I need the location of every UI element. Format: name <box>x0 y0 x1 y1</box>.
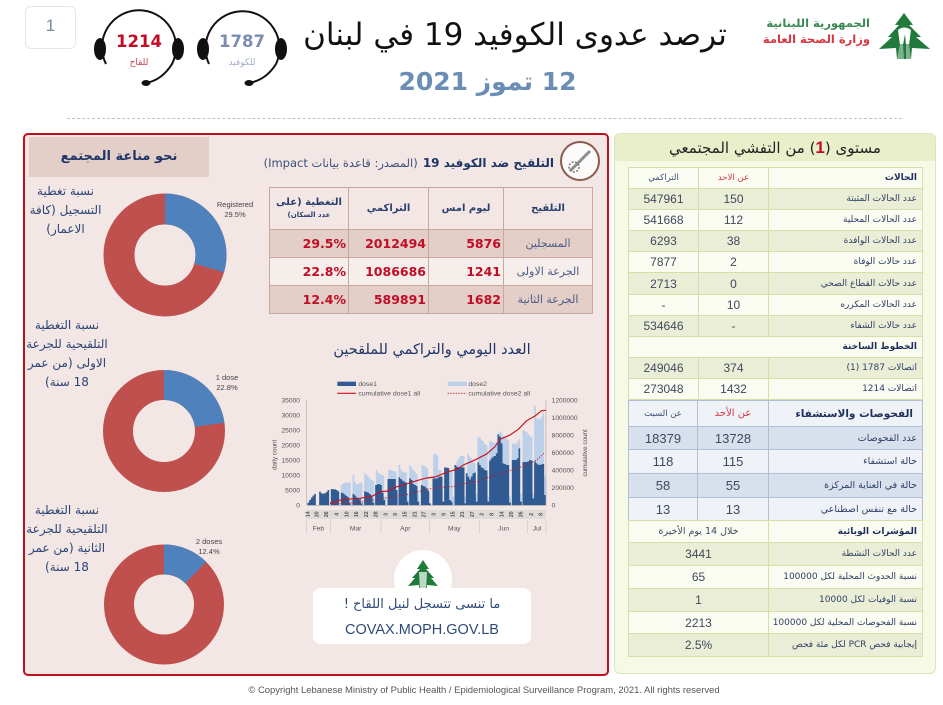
table: cases and hotlines: 541668 <box>643 213 684 227</box>
bar and line chart: daily and cumulative vaccinations: dose2 <box>468 381 487 388</box>
heading: towards community immunity: نحو مناعة المجتمع <box>61 149 177 164</box>
table: cases and hotlines: 6293 <box>650 234 677 248</box>
bar and line chart: daily and cumulative vaccinations: 5000 <box>285 488 300 495</box>
table: epidemiological indicators: المؤشرات الوبائية <box>838 526 917 536</box>
vaccination table <box>269 187 593 314</box>
bar and line chart: daily and cumulative vaccinations: 27 <box>470 511 476 517</box>
bar and line chart: daily and cumulative vaccinations: 35000 <box>281 398 300 405</box>
panel: community transmission level <box>614 133 936 674</box>
bar and line chart: daily and cumulative vaccinations: 30000 <box>281 413 300 420</box>
vaccination table: 2012494 <box>365 236 426 251</box>
bar and line chart: daily and cumulative vaccinations: dose1 <box>358 381 377 388</box>
hotline headset: covid 1787: 1787 <box>219 32 265 51</box>
table: epidemiological indicators: 2.5% <box>685 638 712 652</box>
vaccination table: عدد السكان) <box>288 210 330 218</box>
vaccination table: 589891 <box>374 292 426 307</box>
call to action: register for the vaccine <box>313 550 531 644</box>
table: cases and hotlines: 10 <box>727 298 740 312</box>
table: tests and hospitalisation: 118 <box>653 454 673 469</box>
table: tests and hospitalisation: 13 <box>726 502 740 516</box>
ministry name <box>763 16 870 46</box>
donut value label: 1 dose: 22.8% <box>216 383 238 392</box>
table: cases and hotlines: 0 <box>730 276 737 290</box>
vaccination table: 1241 <box>466 264 501 279</box>
vaccination table: التغطية (على <box>276 196 342 208</box>
table: epidemiological indicators: إيجابية فحص PCR لكل مئة فحص <box>792 640 917 650</box>
donut value label: registered <box>217 200 253 219</box>
table: tests and hospitalisation: 55 <box>726 478 740 493</box>
bar and line chart: daily and cumulative vaccinations: 4 <box>335 513 341 516</box>
bar and line chart: daily and cumulative vaccinations: 26 <box>519 511 525 517</box>
donut label: first dose: نسبة التغطية التلقيحية للجرعة الاولى (من عمر 18 سنة) <box>26 318 108 389</box>
bar and line chart: daily and cumulative vaccinations: cumulative dose1 all <box>358 391 421 398</box>
vaccination table: 1682 <box>466 292 501 307</box>
bar and line chart: daily and cumulative vaccinations: 21 <box>460 511 466 517</box>
table: cases and hotlines: 2713 <box>650 276 677 290</box>
table: tests and hospitalisation: حالة في العناية المركزة <box>824 480 917 491</box>
bar and line chart: daily and cumulative vaccinations: 16 <box>354 511 360 517</box>
vaccination table: الجرعة الثانية <box>518 293 578 306</box>
donut label: second dose: نسبة التغطية التلقيحية للجرعة الثانية (من عمر 18 سنة) <box>26 503 108 574</box>
vaccination table: 1086686 <box>365 264 426 279</box>
bar and line chart: daily and cumulative vaccinations: 26 <box>324 511 330 517</box>
vaccination table: 12.4% <box>303 292 346 307</box>
bar and line chart: daily and cumulative vaccinations: 22 <box>364 511 370 517</box>
bar and line chart: daily and cumulative vaccinations: Mar <box>350 525 362 532</box>
bar and line chart: daily and cumulative vaccinations: 20 <box>509 511 515 517</box>
bar and line chart: daily and cumulative vaccinations: 15 <box>403 511 409 517</box>
donut value label: 2 doses: 12.4% <box>198 547 220 556</box>
bar and line chart: daily and cumulative vaccinations: 10 <box>345 511 351 517</box>
table: cases and hotlines: 249046 <box>643 361 684 375</box>
table: cases and hotlines: 1432 <box>720 382 747 396</box>
table: tests and hospitalisation: 18379 <box>645 430 681 446</box>
table: cases and hotlines: 534646 <box>643 319 684 333</box>
bar and line chart: daily and cumulative vaccinations: cumulative count <box>582 429 589 477</box>
bar and line chart: daily and cumulative vaccinations: 1000000 <box>552 415 578 422</box>
heading: towards community immunity <box>29 137 209 177</box>
table: cases and hotlines: 112 <box>724 213 743 227</box>
bar and line chart: daily and cumulative vaccinations: daily count <box>272 440 279 470</box>
table: cases and hotlines: عدد الحالات المكرره <box>840 300 917 310</box>
table: cases and hotlines: 2 <box>730 255 737 269</box>
table: tests and hospitalisation: عن الأحد <box>715 408 751 419</box>
bar and line chart: daily and cumulative vaccinations: 2 <box>480 513 486 516</box>
bar and line chart: daily and cumulative vaccinations: May <box>448 525 461 532</box>
table: epidemiological indicators: خلال 14 يوم الأخيرة <box>658 526 739 537</box>
table: epidemiological indicators <box>628 520 923 657</box>
bar and line chart: daily and cumulative vaccinations: 14 <box>499 511 505 517</box>
table: tests and hospitalisation: عدد الفحوصات <box>858 432 917 444</box>
table: cases and hotlines: عدد الحالات المحلية <box>843 215 917 225</box>
vaccination table: الجرعة الاولى <box>517 265 579 278</box>
bar and line chart: daily and cumulative vaccinations: 21 <box>412 511 418 517</box>
table: tests and hospitalisation: حالة مع تنفس اصطناعي <box>821 504 917 514</box>
table: cases and hotlines: عدد الحالات الوافدة <box>844 236 917 246</box>
table: epidemiological indicators: نسبة الحدوث المحلية لكل 100000 <box>783 572 917 582</box>
table: epidemiological indicators: 3441 <box>685 547 712 561</box>
donut value label: 1 dose: 1 dose <box>216 373 238 382</box>
table: cases and hotlines: اتصالات 1214 <box>862 384 917 394</box>
table: epidemiological indicators: نسبة الوفيات لكل 10000 <box>819 595 917 605</box>
bar and line chart: daily and cumulative vaccinations: 9 <box>393 513 399 516</box>
table: cases and hotlines: 547961 <box>643 192 684 206</box>
chart title: العدد اليومي والتراكمي للملقحين <box>333 342 531 358</box>
donut value label: 2 doses: 2 doses <box>196 537 222 546</box>
table: cases and hotlines: الخطوط الساخنة <box>843 342 917 352</box>
bar and line chart: daily and cumulative vaccinations: Apr <box>400 525 411 532</box>
bar and line chart: daily and cumulative vaccinations: 3 <box>432 513 438 516</box>
table: epidemiological indicators: 1 <box>695 593 702 607</box>
vaccination table: التراكمي <box>367 203 410 214</box>
register message: ما تنسى تتسجل لنيل اللقاح ! <box>344 597 500 612</box>
bar and line chart: daily and cumulative vaccinations: 20 <box>315 511 321 517</box>
vaccination table: 29.5% <box>303 236 346 251</box>
table: epidemiological indicators: نسبة الفحوصات المحلية لكل 100000 <box>773 618 917 628</box>
icon: cedar in white circle <box>394 550 452 588</box>
hotline headset: vaccine 1214: للقاح <box>130 58 148 68</box>
icon: cedar logo <box>879 13 930 59</box>
bar and line chart: daily and cumulative vaccinations: 20000 <box>281 443 300 450</box>
hotline headset: vaccine 1214 <box>94 9 184 86</box>
bar and line chart: daily and cumulative vaccinations: 15 <box>451 511 457 517</box>
table: tests and hospitalisation: 58 <box>656 478 670 493</box>
table: cases and hotlines: 38 <box>727 234 740 248</box>
table: cases and hotlines: عن الاحد <box>718 173 749 183</box>
donut chart: registered 29.5% <box>104 194 226 316</box>
vaccination table: 22.8% <box>303 264 346 279</box>
bar and line chart: daily and cumulative vaccinations: 8 <box>490 513 496 516</box>
table: cases and hotlines: عدد حالات الوفاة <box>854 257 917 267</box>
panel heading band: مستوى (1) من التفشي المجتمعي <box>669 138 881 157</box>
table: cases and hotlines <box>628 167 923 400</box>
bar and line chart: daily and cumulative vaccinations: 9 <box>441 513 447 516</box>
bar and line chart: daily and cumulative vaccinations: 0 <box>296 502 300 509</box>
donut value label: registered: 29.5% <box>224 210 246 219</box>
table: cases and hotlines: اتصالات 1787 (1) <box>846 363 917 373</box>
bar and line chart: daily and cumulative vaccinations: 14 <box>305 511 311 517</box>
header divider <box>67 118 902 119</box>
bar and line chart: daily and cumulative vaccinations: 2 <box>529 513 535 516</box>
table: cases and hotlines: عدد حالات الشفاء <box>850 321 917 331</box>
table: tests and hospitalisation: 13728 <box>715 430 751 446</box>
table: cases and hotlines: عدد حالات القطاع الصحي <box>821 278 917 288</box>
panel heading band <box>615 134 935 161</box>
table: tests and hospitalisation: عن السبت <box>644 408 682 418</box>
white message card <box>313 588 531 644</box>
table: cases and hotlines: 7877 <box>650 255 677 269</box>
table: tests and hospitalisation: 115 <box>723 454 743 469</box>
vaccination heading with source: التلقيح ضد الكوفيد 19 (المصدر: قاعدة بيانات Impact) <box>264 156 554 170</box>
table: tests and hospitalisation <box>628 400 923 520</box>
vaccination table: 5876 <box>466 236 501 251</box>
bar and line chart: daily and cumulative vaccinations: 15000 <box>281 458 300 465</box>
bar and line chart: daily and cumulative vaccinations: 8 <box>539 513 545 516</box>
vaccination table: المسجلين <box>525 237 570 250</box>
footer copyright: © Copyright Lebanese Ministry of Public Health / Epidemiological Surveillance Program, 2021. All rights reserved <box>248 685 720 696</box>
icon: vaccine syringe <box>560 141 600 181</box>
table: cases and hotlines: عدد الحالات المثبتة <box>846 194 917 204</box>
panel: vaccination <box>23 133 609 676</box>
bar and line chart: daily and cumulative vaccinations: 3 <box>383 513 389 516</box>
table: tests and hospitalisation: حالة استشفاء <box>863 456 917 467</box>
bar and line chart: daily and cumulative vaccinations: 27 <box>422 511 428 517</box>
website address: COVAX.MOPH.GOV.LB <box>345 622 499 638</box>
date heading: 12 تموز 2021 <box>398 67 576 96</box>
bar and line chart: daily and cumulative vaccinations: 200000 <box>552 485 574 492</box>
bar and line chart: daily and cumulative vaccinations: 10000 <box>281 473 300 480</box>
bar and line chart: daily and cumulative vaccinations: 800000 <box>552 433 574 440</box>
table: cases and hotlines: الحالات <box>885 173 917 183</box>
page number box: 1 <box>46 16 55 35</box>
table: cases and hotlines: التراكمي <box>648 173 679 183</box>
donut label: registration: نسبة تغطية التسجيل (كافة الاعمار) <box>30 184 101 236</box>
table: cases and hotlines: - <box>662 298 666 312</box>
donut value label: 1 dose <box>216 373 238 392</box>
table: cases and hotlines: - <box>732 319 736 333</box>
bar and line chart: daily and cumulative vaccinations <box>272 381 589 534</box>
main title: ترصد عدوى الكوفيد 19 في لبنان <box>303 17 727 53</box>
vaccination table: ليوم امس <box>442 203 490 214</box>
hotline headset: covid 1787 <box>197 10 287 86</box>
bar and line chart: daily and cumulative vaccinations: cumulative dose2 all <box>468 391 531 398</box>
bar and line chart: daily and cumulative vaccinations: 0 <box>552 502 556 509</box>
table: epidemiological indicators: 2213 <box>685 616 712 630</box>
donut value label: registered: Registered <box>217 200 253 209</box>
donut chart: 2 doses 12.4% <box>104 544 224 664</box>
page number box <box>25 6 76 49</box>
bar and line chart: daily and cumulative vaccinations: 25000 <box>281 428 300 435</box>
bar and line chart: daily and cumulative vaccinations: 400000 <box>552 468 574 475</box>
table: cases and hotlines: 150 <box>723 192 744 206</box>
table: cases and hotlines: 273048 <box>643 382 684 396</box>
table: epidemiological indicators: 65 <box>692 570 705 584</box>
table: tests and hospitalisation: الفحوصات والاستشفاء <box>795 408 913 420</box>
ministry name: الجمهورية اللبنانية <box>766 16 870 30</box>
table: epidemiological indicators: عدد الحالات النشطة <box>842 549 917 559</box>
table: cases and hotlines: 374 <box>723 361 744 375</box>
bar and line chart: daily and cumulative vaccinations: 600000 <box>552 450 574 457</box>
vaccination table: التلقيح <box>531 203 565 214</box>
bar and line chart: daily and cumulative vaccinations: Jun <box>498 525 509 532</box>
bar and line chart: daily and cumulative vaccinations: Feb <box>313 525 324 532</box>
bar and line chart: daily and cumulative vaccinations: Jul <box>533 525 542 532</box>
bar and line chart: daily and cumulative vaccinations: 28 <box>374 511 380 517</box>
ministry name: وزارة الصحة العامة <box>763 32 870 46</box>
bar and line chart: daily and cumulative vaccinations: 1200000 <box>552 398 578 405</box>
hotline headset: vaccine 1214: 1214 <box>116 32 162 51</box>
donut chart: 1 dose 22.8% <box>103 370 225 492</box>
hotline headset: covid 1787: للكوفيد <box>228 58 256 68</box>
donut value label: 2 doses <box>196 537 222 556</box>
table: tests and hospitalisation: 13 <box>656 502 670 516</box>
